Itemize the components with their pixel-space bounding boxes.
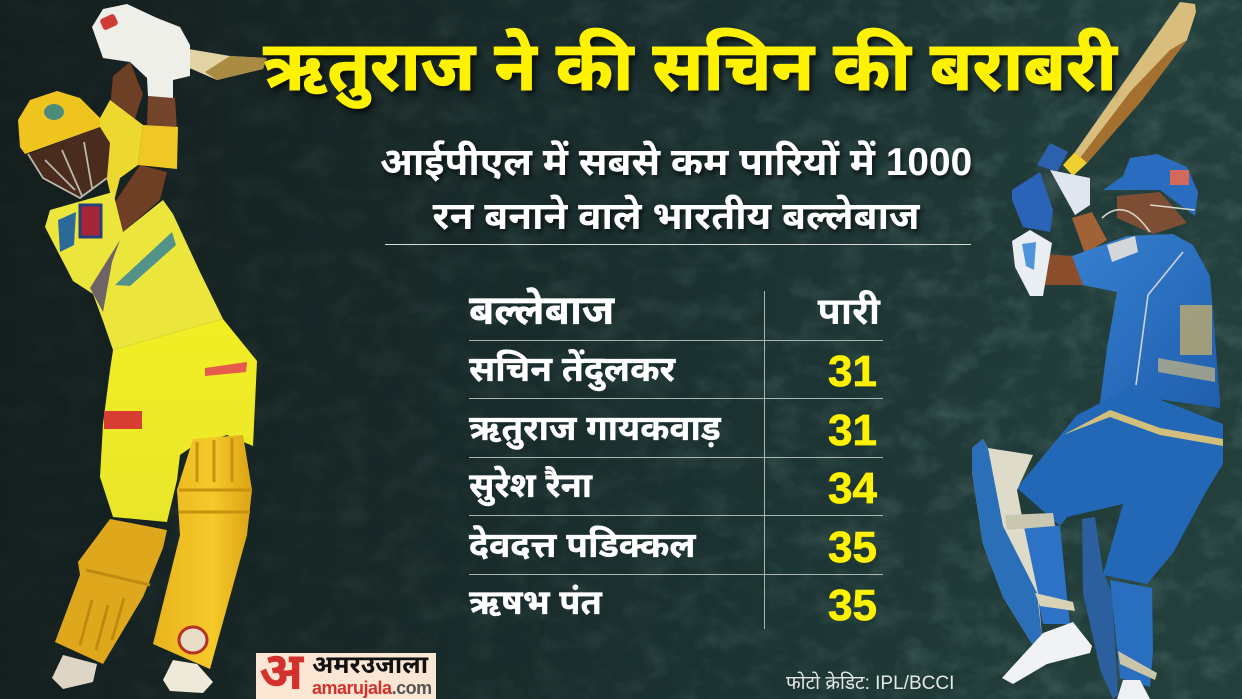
helmet and face [1117,192,1187,234]
table header: batsman: बल्लेबाज [469,287,614,333]
table header: innings: पारी [818,291,880,333]
row 1 name: सचिन तेंदुलकर [469,349,675,389]
gloves [1012,172,1053,232]
bat [1075,2,1196,163]
row 4 name: देवदत्त पडिक्कल [469,525,696,565]
arms [110,62,143,125]
table: fewest innings to 1000 runs [764,291,765,629]
left player: Ruturaj Gaikwad [18,4,267,693]
shirt [45,192,223,350]
gloves [92,4,190,98]
wristband [138,125,178,169]
photo credit: फोटो क्रेडिट: IPL/BCCI [786,673,954,694]
row 4 innings: 35 [828,523,877,572]
row 1 innings: 31 [828,347,877,396]
subtitle: आईपीएल में सबसे कम पारियों में 1000 [380,141,972,184]
front shoe [1002,622,1092,684]
title: ऋतुराज ने की सचिन की बराबरी [263,28,1117,105]
back leg pad [55,519,167,664]
pants [1017,388,1223,584]
subtitle: रन बनाने वाले भारतीय बल्लेबाज [432,195,920,238]
shoes [52,655,97,689]
bat [147,42,267,80]
subtitle [380,140,974,238]
row 5 name: ऋषभ पंत [469,584,602,622]
shirt logos [58,212,76,252]
back leg [1110,580,1153,687]
front leg pad [153,435,252,669]
front calf [1023,522,1070,624]
helmet and face [28,127,110,198]
logo url: amarujala.com [312,678,432,698]
table column divider [764,291,765,629]
subtitle divider [385,244,971,245]
row 5 innings: 35 [828,581,877,630]
row 3 name: सुरेश रैना [469,467,592,505]
forearms [1040,254,1083,285]
front pad [972,439,1043,646]
shirt [1072,234,1220,408]
row 3 innings: 34 [828,464,877,513]
arm guard [1012,230,1052,296]
pants [100,319,257,522]
row 2 innings: 31 [828,406,877,455]
row 2 name: ऋतुराज गायकवाड़ [469,409,721,448]
sleeve [100,100,143,205]
right player: Sachin Tendulkar [972,2,1223,699]
logo: Amar Ujala [256,653,436,699]
